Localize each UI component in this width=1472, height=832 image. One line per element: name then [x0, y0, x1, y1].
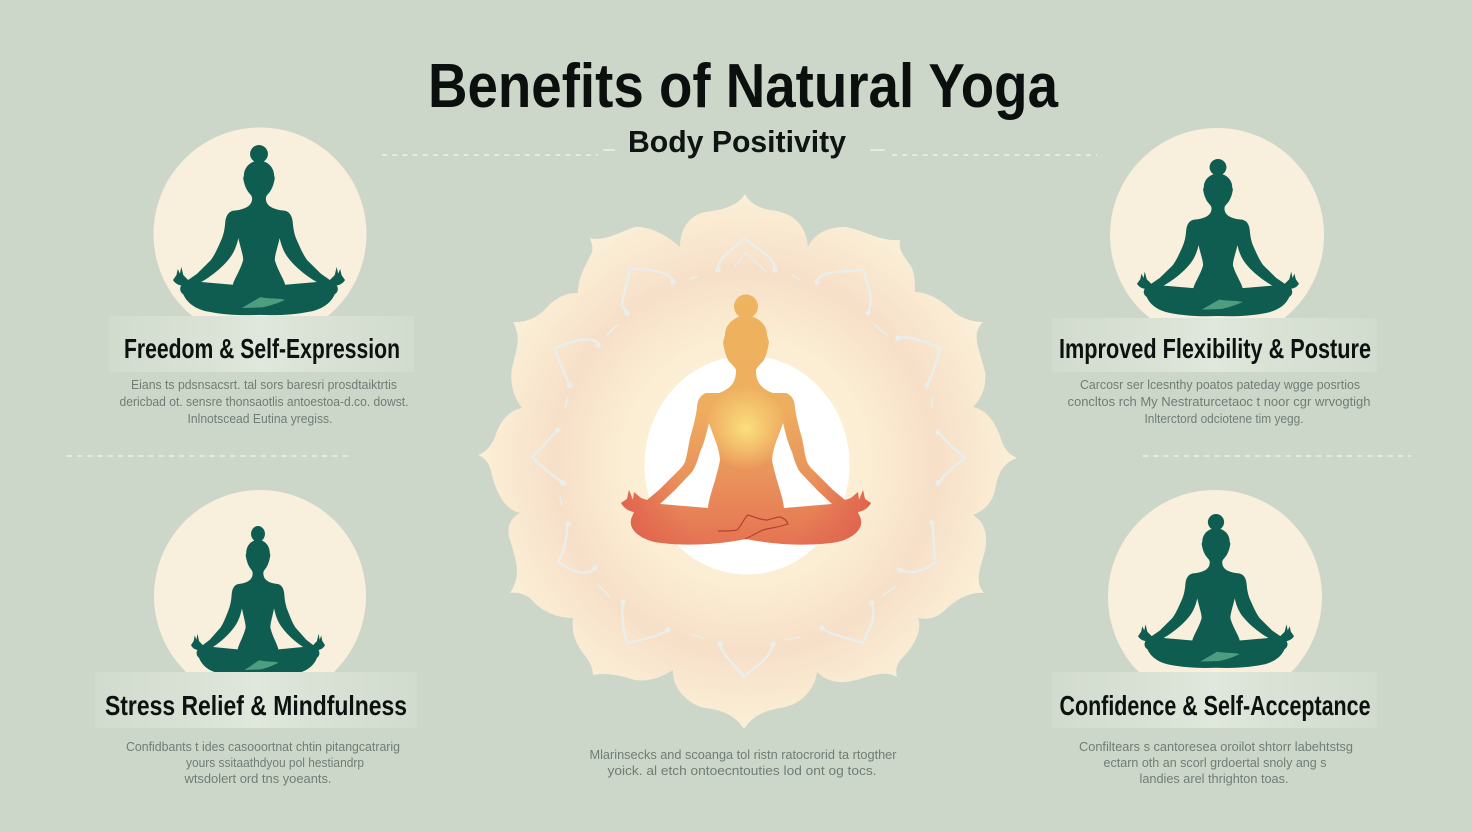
description: Eians ts pdsnsacsrt. tal sors baresri prosdtaiktrtis — [131, 378, 397, 392]
icon: meditating figure on cream circle — [1110, 128, 1324, 342]
heading band — [100, 316, 425, 372]
heading band: Improved Flexibility & Posture — [1059, 333, 1371, 364]
description: wtsdolert ord tns yoeants. — [183, 772, 332, 786]
description — [126, 740, 400, 786]
white sun circle — [644, 356, 850, 574]
orange meditating figure — [621, 294, 871, 545]
center caption: yoick. al etch ontoecntouties lod ont og tocs. — [608, 764, 876, 778]
center caption — [590, 748, 896, 778]
description: Inlnotscead Eutina yregiss. — [188, 412, 332, 426]
description — [1079, 740, 1353, 786]
description: Carcosr ser lcesnthy poatos pateday wgge posrtios — [1080, 378, 1360, 392]
description: dericbad ot. sensre thonsaotlis antoestoa-d.co. dowst. — [120, 395, 408, 409]
description: Confidbants t ides casooortnat chtin pitangcatrarig — [126, 740, 400, 754]
icon: meditating figure on cream circle — [1108, 490, 1322, 704]
description: ectarn oth an scorl grdoertal snoly ang s — [1104, 756, 1326, 770]
heading band: Confidence & Self-Acceptance — [1060, 690, 1370, 721]
heading band — [1045, 318, 1385, 372]
panel: central lotus figure — [478, 194, 1017, 729]
title: Benefits of Natural Yoga — [428, 52, 1058, 121]
ornament ring — [532, 238, 965, 677]
icon: meditating figure on cream circle — [154, 128, 366, 340]
lotus mandala background — [478, 194, 1017, 729]
description: Inlterctord odciotene tim yegg. — [1144, 412, 1304, 426]
panel: Stress Relief and Mindfulness — [90, 490, 425, 786]
description — [1068, 378, 1371, 426]
subtitle: Body Positivity — [628, 124, 847, 159]
panel: Improved Flexibility and Posture — [1045, 128, 1385, 426]
description: yours ssitaathdyou pol hestiandrp — [186, 756, 364, 770]
panel: Confidence and Self-Acceptance — [1045, 490, 1385, 786]
panel: Freedom and Self-Expression — [100, 128, 425, 426]
description: Confiltears s cantoresea oroilot shtorr labehtstsg — [1079, 740, 1353, 754]
icon: meditating figure on cream circle — [154, 490, 366, 702]
heading band: Stress Relief & Mindfulness — [105, 690, 407, 721]
center caption: Mlarinsecks and scoanga tol ristn ratocrorid ta rtogther — [590, 748, 896, 762]
description: concltos rch My Nestraturcetaoc t noor cgr wrvogtigh — [1068, 395, 1371, 409]
heading band — [90, 672, 425, 728]
heading band — [1045, 672, 1385, 728]
description — [120, 378, 408, 426]
description: landies arel thrighton toas. — [1140, 772, 1288, 786]
heading band: Freedom & Self-Expression — [124, 333, 400, 364]
